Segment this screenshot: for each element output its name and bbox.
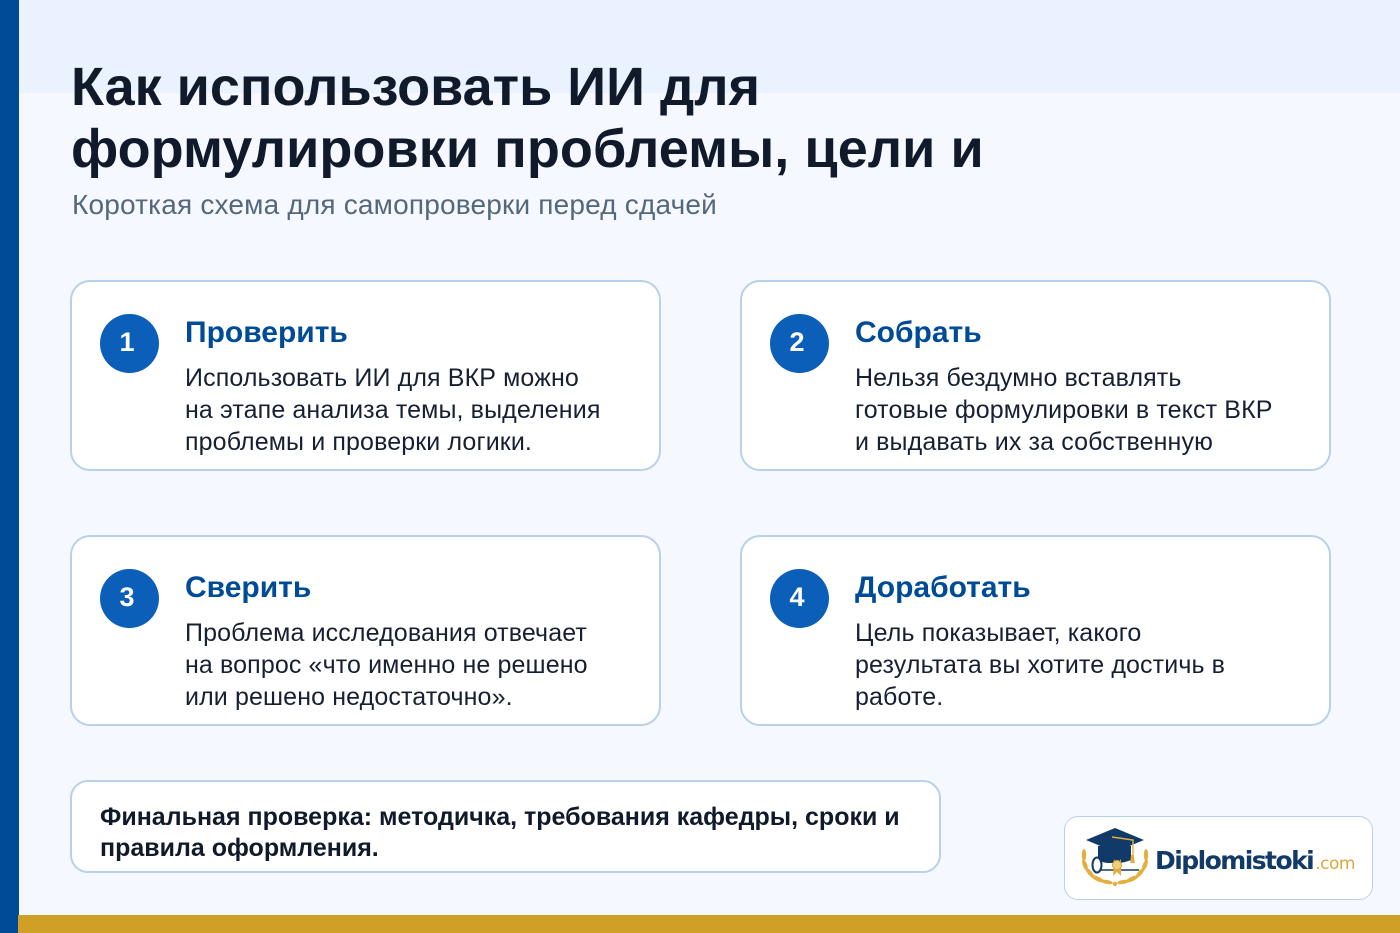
title: формулировки проблемы, цели и [71, 119, 984, 179]
step 3 number: 3 [119, 582, 135, 612]
logo emblem [1082, 828, 1148, 886]
step 2 text: готовые формулировки в текст ВКР [855, 396, 1273, 424]
step 3 heading: Сверить [185, 571, 311, 604]
step 2 text: и выдавать их за собственную [855, 428, 1213, 456]
step 2 number: 2 [789, 327, 805, 357]
step 4 text: Цель показывает, какого [855, 619, 1141, 647]
panel: step 3 [70, 535, 661, 726]
step 4 heading: Доработать [855, 571, 1031, 604]
step 2 number [770, 314, 829, 373]
step 3 text [185, 619, 588, 711]
step 3 text: на вопрос «что именно не решено [185, 651, 588, 679]
title [71, 57, 984, 179]
step 1 text: Использовать ИИ для ВКР можно [185, 364, 579, 392]
header band [19, 0, 1400, 93]
logo wordmark: Diplomistoki.com [1155, 846, 1355, 875]
step 4 number: 4 [789, 582, 805, 612]
step 2 text: Нельзя бездумно вставлять [855, 364, 1182, 392]
step 4 number [770, 569, 829, 628]
panel: step 4 [740, 535, 1331, 726]
step 1 heading: Проверить [185, 316, 348, 349]
panel: step 1 [70, 280, 661, 471]
final check text: правила оформления. [100, 834, 379, 862]
step 2 text [855, 364, 1273, 456]
step 1 number [100, 314, 159, 373]
step 3 number [100, 569, 159, 628]
step 1 number: 1 [119, 327, 135, 357]
step 3 text: или решено недостаточно». [185, 683, 513, 711]
bottom accent bar [18, 915, 1400, 933]
panel: final check [70, 780, 941, 873]
step 4 text: результата вы хотите достичь в [855, 651, 1225, 679]
step 3 text: Проблема исследования отвечает [185, 619, 587, 647]
step 4 text: работе. [855, 683, 943, 711]
title: Как использовать ИИ для [71, 57, 760, 117]
step 1 text [185, 364, 600, 456]
step 4 text [855, 619, 1225, 711]
step 2 heading: Собрать [855, 316, 982, 349]
left accent bar [0, 0, 19, 933]
step 1 text: проблемы и проверки логики. [185, 428, 532, 456]
panel: step 2 [740, 280, 1331, 471]
step 1 text: на этапе анализа темы, выделения [185, 396, 600, 424]
logo box [1064, 816, 1373, 900]
final check text [100, 803, 900, 862]
subtitle: Короткая схема для самопроверки перед сдачей [72, 189, 717, 220]
final check text: Финальная проверка: методичка, требования кафедры, сроки и [100, 803, 900, 831]
